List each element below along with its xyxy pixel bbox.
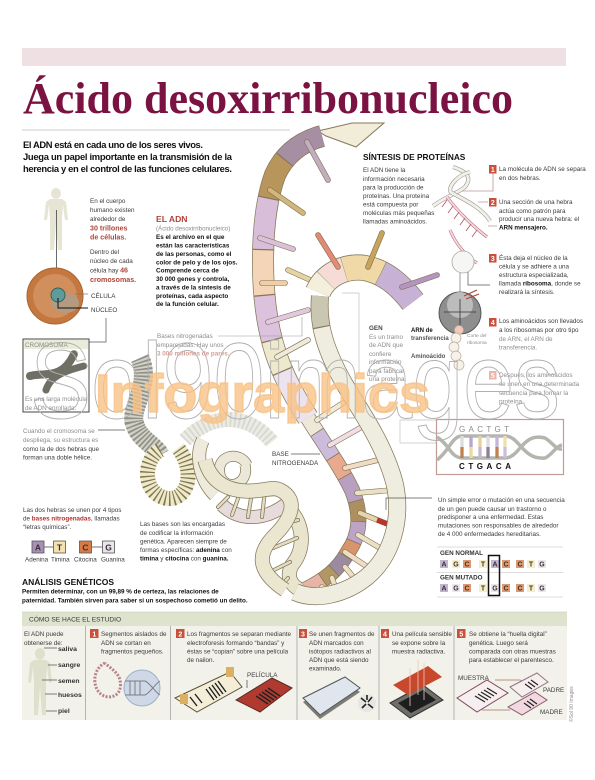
text: dos hebras <box>23 507 121 531</box>
column: step 3: 3 <box>301 632 305 638</box>
row: mutado: T <box>529 586 534 592</box>
intro text: Juega un papel importante en la transmisión de la <box>23 151 233 162</box>
text block: el ADN: Comprende cerca de <box>156 268 219 274</box>
cell facts: Dentro del <box>90 249 119 256</box>
column: step 2: de nailon. <box>187 657 215 664</box>
panel: cómo se hace el estudio <box>22 612 567 720</box>
text block: el ADN: de la función celular. <box>156 301 219 308</box>
intro text <box>23 139 233 174</box>
title banner <box>22 48 566 66</box>
text: bases codifican: timina y citocina con guanina. <box>140 556 229 562</box>
intro text: El ADN está en cada uno de los seres vivos. <box>23 139 203 150</box>
column: step 2: electroforesis formando “bandas” y <box>187 640 285 647</box>
text: gen: una proteína. <box>369 376 406 383</box>
text: mutación: de un gen puede causar un trastorno o <box>438 506 547 513</box>
text: despliegue del cromosoma: como la de dos hebras que <box>23 446 99 453</box>
heading: CÓMO SE HACE EL ESTUDIO <box>29 614 121 624</box>
icon: chromosome <box>30 354 84 390</box>
illustration: ribosome: ribosoma <box>467 340 487 346</box>
illustration: ribosome: transferencia <box>411 336 449 342</box>
text block: el ADN <box>156 214 238 308</box>
text: dos hebras: “letras químicas”. <box>23 524 72 531</box>
sequence letters: GACTGT <box>459 425 509 434</box>
text: gen: Es un tramo <box>369 334 403 341</box>
intro: para la producción de <box>363 184 424 192</box>
text: gen: de ADN que <box>369 342 403 349</box>
column: sources: piel <box>58 708 70 715</box>
row: mutado: C <box>517 586 523 592</box>
illustration: ribosome <box>411 272 487 370</box>
column: step 3: Se unen fragmentos de <box>309 631 375 638</box>
column: step 3: ADN que está siendo <box>309 657 369 664</box>
column: step 3 <box>299 629 376 719</box>
title: Ácido desoxirribonucleico <box>23 74 513 123</box>
icon: gel <box>175 667 242 712</box>
análisis genéticos <box>22 577 248 604</box>
column: step 5: comparada con otras muestras <box>469 648 556 656</box>
step 2: actúa como patrón para <box>499 208 566 215</box>
step 3: célula y se adhiere a una <box>499 264 570 270</box>
legend: bases: G <box>105 542 112 552</box>
text: despliegue del cromosoma: despliega, su estructura es <box>23 437 98 444</box>
text block: el ADN: a través de la síntesis de <box>156 284 231 292</box>
step 3: Ésta deja el núcleo de la <box>499 253 568 262</box>
legend: bases: Guanina <box>101 556 125 564</box>
column: step 1 <box>90 629 167 706</box>
panel: cromosoma: de ADN enrollada. <box>25 405 76 412</box>
text: mutación: predisponer a una enfermedad. Estas <box>438 514 543 521</box>
column: step 2: Los fragmentos se separan mediante <box>187 631 291 638</box>
text block: el ADN: proteínas, cada aspecto <box>156 293 228 300</box>
icon: cell <box>27 268 88 324</box>
rungs <box>462 436 505 458</box>
column: step 4: se expone sobre la <box>392 640 446 647</box>
text: dos hebras: de bases nitrogenadas, llamadas <box>23 516 120 522</box>
row: mutado: G <box>492 586 498 592</box>
step 5 <box>489 371 580 406</box>
panel: DNA sequence <box>400 420 564 474</box>
column: step 1: fragmentos pequeños. <box>101 648 164 656</box>
chart: gen normal vs gen mutado: GEN MUTADO <box>440 574 483 582</box>
legend: bases: A <box>35 542 41 552</box>
intro: moléculas más pequeñas <box>363 210 434 217</box>
cell facts <box>90 198 136 314</box>
step 3 <box>489 253 581 296</box>
text: bases codifican: de codificar la información <box>140 530 214 537</box>
column: step 3: ADN marcados con <box>309 640 364 647</box>
intro: llamadas aminoácidos. <box>363 218 427 226</box>
step 2: producir una nueva hebra: el <box>499 216 579 223</box>
step 5: Después, los aminoácidos <box>499 372 573 379</box>
cell facts: alrededor de <box>90 216 126 223</box>
text: gen: confiere <box>369 351 392 358</box>
column: step 1: ADN se cortan en <box>101 640 151 647</box>
step 1: 1 <box>491 167 495 174</box>
text block: el ADN: Es el archivo en el que <box>156 234 225 241</box>
intro: El ADN tiene la <box>363 167 406 174</box>
label: base nitrogenada: BASE <box>272 451 289 458</box>
column: step 5: MADRE <box>540 709 563 716</box>
step 5: se unen en una determinada <box>499 381 580 388</box>
mutation highlight <box>488 556 500 596</box>
icon: body <box>28 648 52 715</box>
row: normal: T <box>529 562 534 568</box>
cell facts: CÉLULA <box>91 291 116 300</box>
column: sources: sangre <box>58 662 81 669</box>
illustration: ribosome: ARN de <box>411 328 433 334</box>
column: step 5: para establecer el parentesco. <box>469 657 554 664</box>
helix strands <box>437 436 562 460</box>
illustration: ribosome: Corte del <box>467 333 486 339</box>
step 4: 4 <box>491 320 495 327</box>
icon: sample <box>457 680 508 712</box>
column: sources: huesos <box>58 692 82 699</box>
text: despliegue del cromosoma: Cuando el cromosoma se <box>23 428 95 435</box>
step 1: La molécula de ADN se separa <box>499 166 586 173</box>
step 5: proteína. <box>499 398 524 406</box>
step 2 <box>489 198 579 232</box>
column: step 2: éstas se “copian” sobre una película <box>187 648 289 656</box>
panel: body and cell <box>27 188 136 324</box>
column: step 5 <box>457 629 564 716</box>
icon: DNA fragments <box>95 663 160 706</box>
panel: cromosoma: CROMOSOMA <box>25 342 68 349</box>
intro: está compuesta por <box>363 202 418 208</box>
cell facts: de células. <box>90 234 126 242</box>
column: sources: semen <box>58 678 80 685</box>
column: step 5: 5 <box>459 632 463 638</box>
cream inner strand <box>295 267 413 596</box>
text: gen: para fabricar <box>369 368 404 375</box>
legend: bases: T <box>57 542 63 552</box>
text: despliegue del cromosoma: forman una doble hélice. <box>23 454 92 462</box>
column: step 5: genética. Luego será <box>469 640 528 647</box>
text: bases nitrogenadas: Bases nitrogenadas <box>157 333 213 340</box>
icon: film: PELÍCULA <box>247 670 278 679</box>
text: mutación <box>386 497 565 538</box>
chart: gen normal vs gen mutado: GEN NORMAL <box>440 550 483 557</box>
coloured strand <box>263 136 358 590</box>
text: gen: información <box>369 359 402 366</box>
step 5: 5 <box>491 373 495 380</box>
icon: father <box>510 673 548 697</box>
legend: bases: C <box>82 542 89 552</box>
intro <box>363 167 434 226</box>
panel: DNA sequence: CTGACA <box>459 462 511 471</box>
row: normal: C <box>503 562 509 568</box>
column: sources: El ADN puede <box>24 631 64 638</box>
step 4: de ARN, el ARN de <box>499 336 553 343</box>
label: base nitrogenada: NITROGENADA <box>272 460 319 467</box>
label: base nitrogenada <box>272 451 320 467</box>
step 5: secuencia para formar la <box>499 390 569 397</box>
icon: coiled chromatin <box>134 358 272 499</box>
icon: human body <box>44 188 68 250</box>
row: mutado: C <box>464 586 470 592</box>
column: step 2 <box>175 629 292 712</box>
lower helix rungs <box>218 490 298 585</box>
step 3: estructura especializada, <box>499 272 569 279</box>
text: mutación: mutaciones son responsables de alrededor <box>438 522 558 530</box>
base pair rungs <box>260 142 395 597</box>
rear tip of ribbon <box>318 123 384 147</box>
step 3: 3 <box>491 256 495 263</box>
row: mutado: T <box>481 586 486 592</box>
text: gen <box>342 293 406 383</box>
illustration: DNA helix <box>199 123 437 597</box>
step 4: Los aminoácidos son llevados <box>499 318 583 325</box>
text block: el ADN: 30 000 genes y controla, <box>156 276 230 283</box>
column: sources <box>24 631 82 715</box>
column: step 4: Una película sensible <box>392 631 452 638</box>
intro: información necesaria <box>363 176 425 183</box>
row: mutado <box>440 584 546 592</box>
row: normal: C <box>517 562 523 568</box>
cell facts: núcleo de cada <box>90 258 133 265</box>
row: normal <box>440 560 546 568</box>
row: mutado: C <box>503 586 509 592</box>
text block: el ADN: EL ADN <box>156 214 188 224</box>
row: mutado: G <box>539 586 545 592</box>
step 2: ARN mensajero. <box>499 224 548 232</box>
row: mutado: G <box>453 586 459 592</box>
cell facts: NÚCLEO <box>91 305 117 314</box>
legend: bases: Timina <box>51 556 70 564</box>
column: step 3: isótopos radiactivos al <box>309 648 371 656</box>
step 4: transferencia. <box>499 344 537 352</box>
panel: cromosoma <box>23 318 106 412</box>
análisis genéticos: Permiten determinar, con un 99,89 % de certeza, las relaciones de <box>22 588 219 596</box>
column: step 3: examinado. <box>309 666 342 672</box>
legend: bases: Adenina <box>25 556 49 564</box>
text: mutación: Un simple error o mutación en una secuencia <box>438 497 565 504</box>
intro: proteínas. Una proteína <box>363 193 430 200</box>
icon: tray <box>303 677 376 719</box>
cell facts: humano existen <box>90 207 135 214</box>
step 4 <box>489 318 583 352</box>
column: step 4 <box>381 629 452 718</box>
heading: SÍNTESIS DE PROTEÍNAS <box>363 152 466 162</box>
text block: el ADN: (Ácido desoxirribonucleico) <box>156 226 230 232</box>
text: despliegue del cromosoma <box>23 428 125 462</box>
icon: mother <box>508 692 547 715</box>
step 2: Una sección de una hebra <box>499 199 573 206</box>
column: step 2: 2 <box>178 632 182 638</box>
column: step 5: PADRE <box>543 687 564 694</box>
row: normal: G <box>453 562 459 568</box>
text: dos hebras: Las dos hebras se unen por 4 tipos <box>23 507 121 514</box>
intro text: herencia y en el control de las funciones celulares. <box>23 163 232 174</box>
column: step 1: Segmentos aislados de <box>101 631 167 638</box>
text: mutación: de 4 000 enfermedades hereditarias. <box>438 531 541 538</box>
step 2: 2 <box>491 200 495 207</box>
cell facts: célula hay 46 <box>90 266 128 274</box>
step 1: en dos hebras. <box>499 175 541 182</box>
análisis genéticos: ANÁLISIS GENÉTICOS <box>22 577 114 587</box>
row: normal: T <box>481 562 486 568</box>
cell facts: En el cuerpo <box>90 198 126 205</box>
text: bases nitrogenadas <box>157 317 302 358</box>
illustration: DNA separating <box>433 167 497 285</box>
step 3: llamada ribosoma, donde se <box>499 280 581 288</box>
text: gen: GEN <box>369 325 383 332</box>
column: step 1: 1 <box>92 632 96 638</box>
text block: el ADN: de las personas, como el <box>156 251 232 258</box>
row: normal: A <box>492 562 498 568</box>
legend: bases: Citocina <box>74 556 97 564</box>
panel: cromosoma: Es una larga molécula <box>25 396 88 403</box>
text block: el ADN: están las características <box>156 242 230 250</box>
icon: exposure <box>390 660 443 718</box>
column: sources: saliva <box>58 646 77 653</box>
step 1 <box>489 165 586 182</box>
column: step 5: MUESTRA <box>458 675 490 682</box>
text: bases codifican <box>140 521 232 562</box>
arch rungs <box>318 233 437 287</box>
text: bases nitrogenadas: 3 000 millones de pares. <box>157 350 230 358</box>
amino acid chain <box>449 326 464 370</box>
text: bases codifican: genética. Aparecen siempre de <box>140 538 227 546</box>
step 3: realizará la síntesis. <box>499 289 555 296</box>
row: normal: A <box>441 562 447 568</box>
row: normal: G <box>539 562 545 568</box>
illustration: ribosome: Aminoácido <box>411 354 446 360</box>
legend: bases <box>25 541 125 564</box>
lower helix ribbons <box>199 440 310 592</box>
panel: síntesis de proteínas <box>363 152 586 406</box>
text: bases codifican: Las bases son las encargadas <box>140 521 225 528</box>
análisis genéticos: paternidad. También sirven para saber si un sospechoso cometió un delito. <box>22 598 248 604</box>
cell facts: cromosomas. <box>90 276 136 284</box>
cell facts: 30 trillones <box>90 224 128 232</box>
text: bases nitrogenadas: emparejadas. Hay unos <box>157 342 224 349</box>
row: mutado: A <box>441 586 447 592</box>
text: bases codifican: formas específicas: adenina con <box>140 547 232 554</box>
credit: ©Sol 90 Images <box>568 686 575 722</box>
watermark: Infographics <box>95 364 430 424</box>
column: sources: obtenerse de: <box>24 640 63 647</box>
step 4: a los ribosomas por otro tipo <box>499 327 579 334</box>
text block: el ADN: color de pelo y de los ojos. <box>156 260 238 266</box>
column: step 4: 4 <box>383 632 387 638</box>
chart: gen normal vs gen mutado <box>437 547 563 597</box>
row: normal: C <box>464 562 470 568</box>
column: step 4: muestra radiactiva. <box>392 648 445 656</box>
column: step 5: Se obtiene la “huella digital” <box>469 631 547 638</box>
